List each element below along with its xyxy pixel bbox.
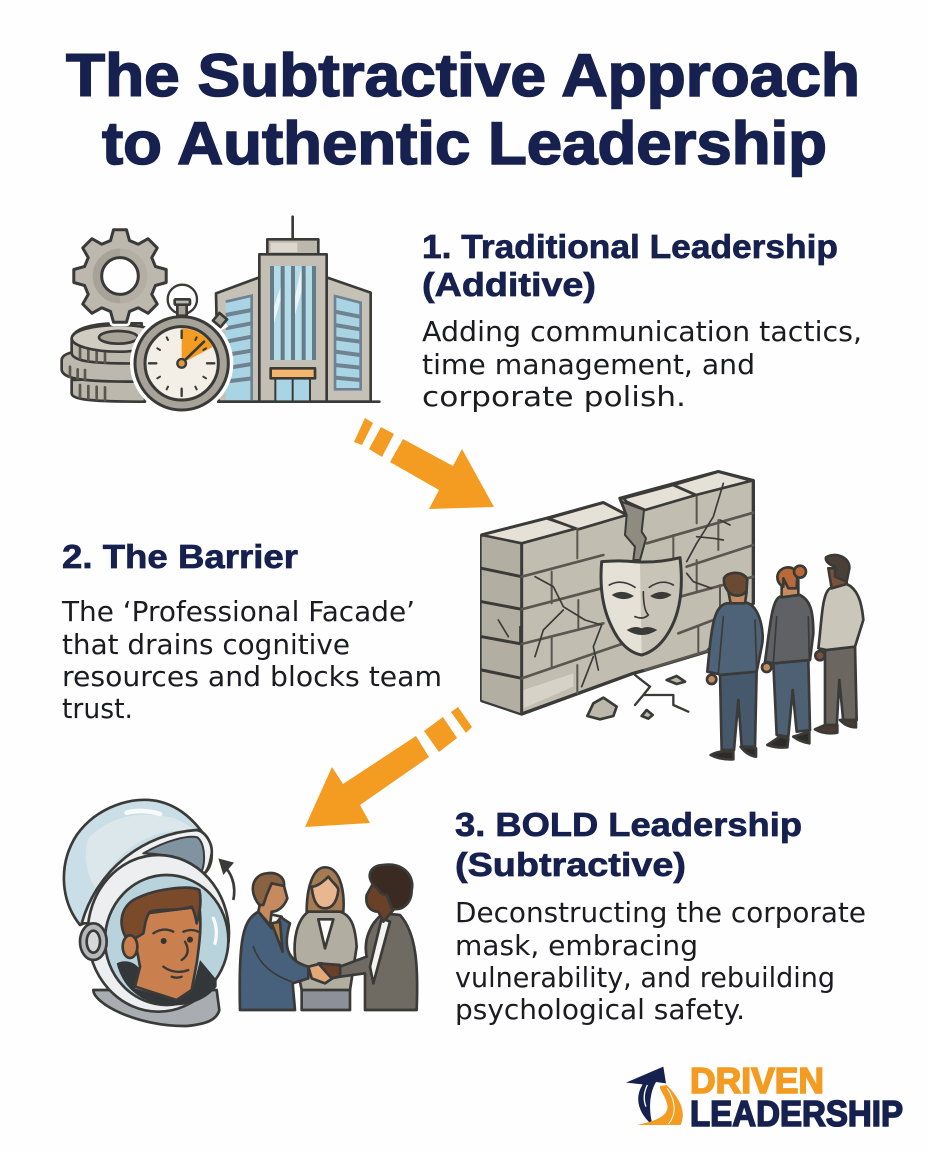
logo wordmark: DRIVEN: [690, 1060, 824, 1101]
text: step 2 description: resources and blocks team: [62, 661, 442, 693]
arrow: step 1 to step 2: [354, 418, 494, 509]
icon: gear: [74, 230, 166, 322]
heading: step 3: (Subtractive): [455, 846, 686, 883]
heading: step 1: (Additive): [422, 266, 596, 303]
text: step 1 description: [422, 316, 862, 413]
icon: astronaut helmet: [64, 800, 229, 1026]
mask: [601, 558, 681, 655]
handshake: [308, 963, 340, 983]
title: [66, 42, 860, 177]
heading: step 1: [422, 228, 838, 303]
person: woman in grey suit: [295, 867, 357, 1010]
text: step 3 description: [455, 897, 866, 1026]
icon: office building: [216, 217, 379, 402]
text: step 1 description: Adding communication tactics,: [422, 316, 862, 348]
text: step 3 description: mask, embracing: [455, 930, 698, 962]
arrow: step 2 to step 3: [305, 707, 472, 827]
person: beige sweater: [815, 555, 863, 733]
heading: step 1: 1. Traditional Leadership: [422, 228, 838, 265]
person: man in blue suit: [240, 873, 308, 1010]
text: step 2 description: trust.: [62, 693, 133, 725]
text: step 2 description: that drains cognitive: [62, 629, 350, 661]
heading: step 3: [455, 806, 802, 883]
icon: stopwatch: [130, 285, 233, 415]
heading: step 3: 3. BOLD Leadership: [455, 806, 802, 843]
text: step 3 description: Deconstructing the corporate: [455, 897, 866, 929]
illustration: cracked wall with mask and team: [482, 472, 863, 759]
text: step 1 description: time management, and: [422, 349, 755, 381]
logo: Driven Leadership: [626, 1060, 903, 1134]
title: to Authentic Leadership: [102, 110, 827, 177]
logo mark: [626, 1067, 683, 1125]
logo wordmark: LEADERSHIP: [690, 1093, 903, 1134]
icon: gear, coins, stopwatch and office building: [62, 217, 379, 415]
title: The Subtractive Approach: [66, 42, 860, 109]
illustration: helmet and team handshake: [64, 800, 417, 1026]
logo wordmark: [690, 1060, 903, 1134]
heading: step 2: 2. The Barrier: [62, 538, 298, 575]
rubble: [587, 676, 685, 719]
handshake team: [240, 865, 417, 1010]
text: step 3 description: psychological safety.: [455, 994, 745, 1026]
icon: coin stack: [62, 323, 165, 402]
arrow: visor lifted: [218, 858, 234, 900]
wall cracks: [498, 483, 730, 712]
text: step 3 description: vulnerability, and rebuilding: [455, 962, 835, 994]
text: step 2 description: [61, 596, 442, 725]
person: grey suit: [762, 566, 813, 748]
brick wall: [482, 472, 753, 714]
person: woman in dark suit: [340, 865, 417, 1010]
person: blue suit: [707, 573, 763, 759]
text: step 1 description: corporate polish.: [422, 381, 686, 413]
text: step 2 description: The ‘Professional Facade’: [61, 596, 415, 628]
